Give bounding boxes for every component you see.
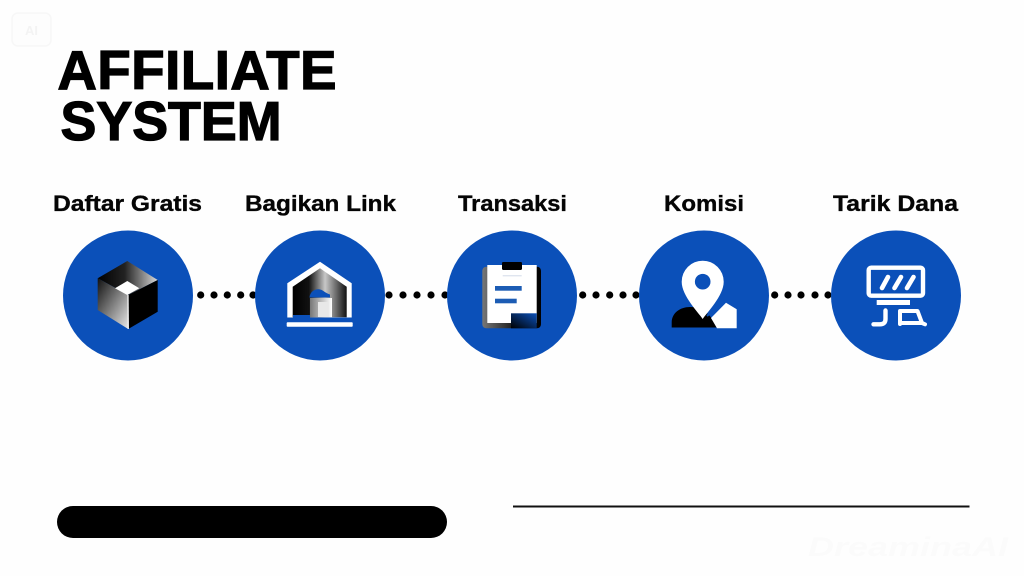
step circle: Komisi	[639, 230, 769, 360]
step circle: Transaksi	[447, 230, 577, 360]
dotted connector 4	[771, 291, 832, 299]
dotted connector 2	[385, 291, 449, 299]
icon: cube	[98, 261, 158, 329]
step label: Bagikan Link: Bagikan Link	[245, 191, 397, 216]
faint AI badge	[12, 13, 51, 46]
step circle: Daftar Gratis	[63, 230, 193, 360]
step label: Daftar Gratis: Daftar Gratis	[53, 191, 202, 216]
icon: map pin with hill and house	[672, 261, 737, 328]
icon: clipboard	[482, 262, 541, 328]
step label: Komisi: Komisi	[664, 191, 744, 216]
step circle: Bagikan Link	[255, 230, 385, 360]
title: SYSTEM	[60, 91, 282, 152]
title: AFFILIATE	[58, 40, 336, 101]
icon: house	[287, 262, 353, 327]
faint watermark: DreaminaAI	[808, 532, 1009, 562]
dotted connector 3	[579, 291, 640, 299]
step label: Tarik Dana: Tarik Dana	[833, 191, 959, 216]
icon: monitor	[869, 268, 925, 324]
step circle: Tarik Dana	[831, 230, 961, 360]
faint AI badge: AI	[25, 23, 38, 38]
title	[58, 40, 336, 152]
dotted connector 1	[197, 291, 257, 299]
step label: Transaksi: Transaksi	[458, 191, 567, 216]
bottom black pill	[57, 506, 447, 538]
bottom rule line	[513, 506, 970, 508]
